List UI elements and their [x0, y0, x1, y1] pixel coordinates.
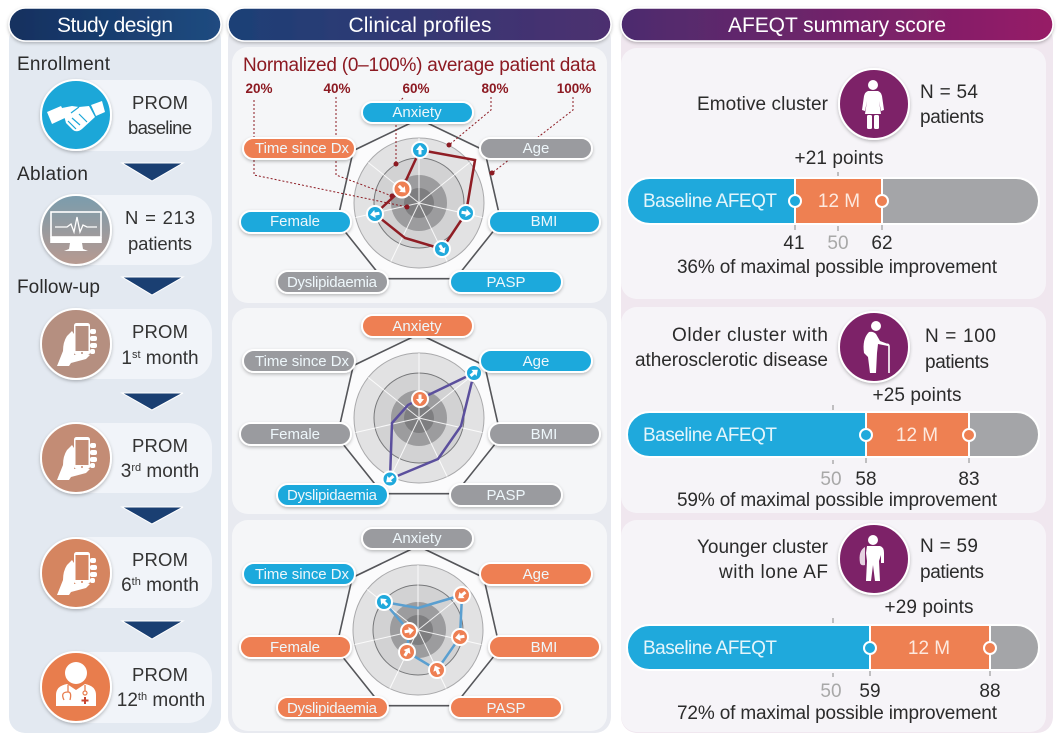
- cluster: emotive: patients: [920, 107, 984, 128]
- icon: young person with backpack: [860, 535, 884, 581]
- cluster: older: Older cluster with: [672, 325, 828, 346]
- cluster: older: +25 points: [872, 385, 962, 406]
- score bar: emotive: 50: [827, 233, 849, 254]
- score bar: younger: 50: [820, 681, 842, 702]
- step: PROM 1st month: [41, 309, 212, 379]
- label: enrollment: Enrollment: [17, 54, 111, 75]
- score bar: older: 59% of maximal possible improvement: [677, 490, 998, 511]
- radar chart: younger cluster: [240, 528, 600, 718]
- score bar: emotive: [627, 172, 1039, 278]
- cluster: younger: Younger cluster: [697, 537, 829, 558]
- score bar: older: 50: [820, 469, 842, 490]
- icon: older person: [864, 321, 889, 373]
- radar chart: emotive cluster: PASP: [487, 274, 525, 291]
- radar chart: emotive cluster: BMI: [531, 213, 557, 230]
- radar chart: older cluster: Dyslipidaemia: [287, 487, 378, 504]
- radar chart: younger cluster: Anxiety: [392, 530, 442, 547]
- radar chart: emotive cluster: Time since Dx: [255, 140, 350, 157]
- step: PROM 6th month: 6: [121, 575, 132, 596]
- cluster: younger: with lone AF: [718, 562, 828, 583]
- label: ablation: Ablation: [17, 164, 88, 185]
- step: PROM 6th month: [41, 537, 212, 608]
- step: PROM 3rd month: PROM: [132, 435, 188, 456]
- heading: study design: Study design: [57, 14, 173, 37]
- step: PROM 12th month: PROM: [132, 664, 188, 685]
- step: PROM baseline: [41, 80, 212, 151]
- score bar: younger: [627, 618, 1039, 724]
- score bar: older: 83: [958, 469, 980, 490]
- score bar: older: Baseline AFEQT: [643, 425, 777, 446]
- cluster: older: N = 100: [925, 326, 996, 347]
- cluster: emotive: [697, 69, 984, 169]
- scale labels: 20%: [245, 81, 273, 96]
- cluster: older: patients: [925, 352, 989, 373]
- scale labels: 60%: [402, 81, 430, 96]
- radar chart: older cluster: Anxiety: [392, 318, 442, 335]
- heading: clinical profiles: [228, 8, 611, 41]
- arrow: [122, 621, 183, 639]
- score bar: younger: Baseline AFEQT: [643, 638, 777, 659]
- scale labels: 80%: [481, 81, 509, 96]
- step: N = 213 patients: N = 213: [125, 207, 195, 228]
- radar chart: younger cluster: Time since Dx: [255, 566, 350, 583]
- heading: AFEQT summary score: [621, 8, 1053, 41]
- cluster: younger: patients: [920, 562, 984, 583]
- radar chart: older cluster: Female: [270, 426, 320, 443]
- icon: doctor: [56, 662, 96, 706]
- label: follow-up: Follow-up: [17, 277, 100, 298]
- radar chart: older cluster: Age: [523, 353, 549, 370]
- data line: [384, 595, 462, 670]
- score bar: emotive: 12 M: [818, 191, 860, 212]
- radar chart: younger cluster: BMI: [531, 639, 557, 656]
- score bar: emotive: 41: [783, 233, 805, 254]
- score bar: younger: 72% of maximal possible improvement: [677, 703, 998, 724]
- score bar: emotive: 36% of maximal possible improvement: [677, 257, 998, 278]
- heading: study design: [9, 8, 221, 41]
- step: N = 213 patients: [41, 195, 212, 265]
- score bar: older: [627, 405, 1039, 511]
- step: PROM 1st month: 1: [121, 348, 132, 369]
- heading: clinical profiles: Clinical profiles: [348, 14, 492, 37]
- radar chart: emotive cluster: [240, 81, 600, 293]
- radar chart: younger cluster: PASP: [487, 700, 525, 717]
- radar chart: younger cluster: Age: [523, 566, 549, 583]
- step: PROM 1st month: month: [141, 348, 199, 369]
- step: PROM 12th month: month: [147, 690, 205, 711]
- step: PROM 12th month: th: [138, 691, 147, 703]
- cluster: younger: [697, 524, 984, 618]
- radar chart: emotive cluster: Age: [523, 140, 549, 157]
- panel: clinical profiles: [228, 8, 611, 733]
- radar chart: older cluster: PASP: [487, 487, 525, 504]
- icon: phone in hand: [57, 323, 97, 366]
- score bar: younger: 12 M: [908, 638, 950, 659]
- cluster: emotive: N = 54: [920, 82, 978, 103]
- cluster: older: atherosclerotic disease: [635, 350, 828, 371]
- score bar: younger: 88: [979, 681, 1001, 702]
- cluster: younger: N = 59: [920, 536, 978, 557]
- step: PROM 3rd month: rd: [131, 462, 141, 474]
- score bar: emotive: Baseline AFEQT: [643, 191, 777, 212]
- cluster: younger: +29 points: [884, 597, 974, 618]
- radar chart: older cluster: Time since Dx: [255, 353, 350, 370]
- step: N = 213 patients: patients: [128, 233, 192, 254]
- data line: [390, 373, 474, 479]
- heading: AFEQT summary score: AFEQT summary score: [728, 14, 946, 37]
- cluster: emotive: Emotive cluster: [697, 94, 829, 115]
- step: PROM baseline: PROM: [132, 92, 188, 113]
- icon: handshake: [47, 101, 105, 131]
- radar chart: older cluster: [240, 315, 600, 506]
- icon: monitor: [50, 212, 102, 251]
- step: PROM baseline: baseline: [128, 117, 192, 138]
- radar title: Normalized (0–100%) average patient data: [243, 55, 596, 76]
- cluster: emotive: +21 points: [794, 148, 884, 169]
- step: PROM 1st month: st: [132, 349, 141, 361]
- arrow: [122, 393, 183, 410]
- arrow: [122, 507, 183, 524]
- step: PROM 6th month: th: [132, 576, 141, 588]
- cluster: older: [635, 312, 996, 406]
- icon: phone in hand: [57, 437, 97, 480]
- radar chart: emotive cluster: Dyslipidaemia: [287, 274, 378, 291]
- radar chart: older cluster: BMI: [531, 426, 557, 443]
- step: PROM 12th month: [41, 652, 212, 723]
- score bar: older: 12 M: [896, 425, 938, 446]
- scale labels: 40%: [323, 81, 351, 96]
- scale labels: [245, 81, 591, 96]
- score bar: emotive: 62: [871, 233, 893, 254]
- step: PROM 3rd month: 3: [121, 461, 131, 482]
- radar chart: emotive cluster: Female: [270, 213, 320, 230]
- step: PROM 6th month: PROM: [132, 549, 188, 570]
- step: PROM 12th month: 12: [117, 690, 138, 711]
- arrow: [122, 163, 183, 181]
- step: PROM 1st month: PROM: [132, 321, 188, 342]
- step: PROM 6th month: month: [141, 575, 199, 596]
- score bar: older: 58: [855, 469, 877, 490]
- icon: woman: [862, 80, 884, 129]
- arrow: [122, 277, 183, 295]
- step: PROM 3rd month: [41, 423, 212, 493]
- data line: [375, 150, 475, 249]
- scale labels: 100%: [557, 81, 591, 96]
- panel: AFEQT summary score: [621, 8, 1053, 733]
- panel: study design: [9, 8, 221, 733]
- icon: phone in hand: [57, 552, 97, 595]
- radar chart: emotive cluster: Anxiety: [392, 104, 442, 121]
- step: PROM 3rd month: month: [141, 461, 199, 482]
- radar chart: younger cluster: Female: [270, 639, 320, 656]
- radar chart: younger cluster: Dyslipidaemia: [287, 700, 378, 717]
- score bar: younger: 59: [859, 681, 881, 702]
